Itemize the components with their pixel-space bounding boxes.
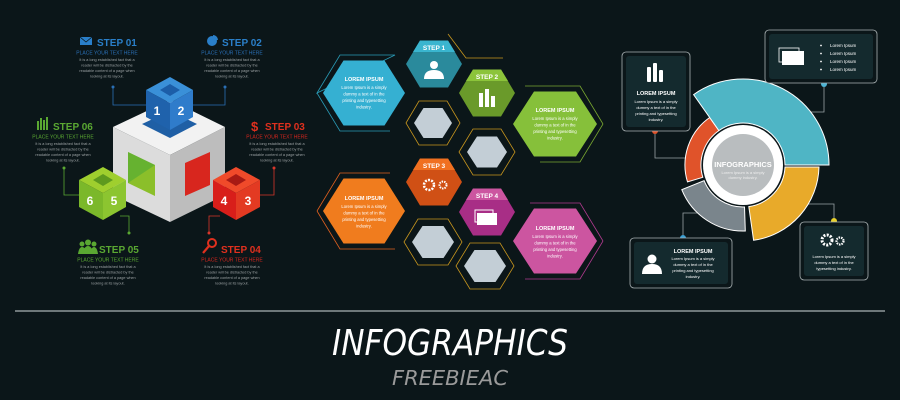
hex: step 1 — [406, 40, 462, 88]
hex: lorem orange: LOREM IPSUM — [345, 196, 384, 202]
step 04: STEP 04 — [221, 245, 261, 256]
step 02: looking at its layout. — [215, 74, 249, 78]
step 04: PLACE YOUR TEXT HERE — [201, 258, 263, 264]
hex: lorem green: dummy a text of in the — [534, 122, 576, 128]
step 02: PLACE YOUR TEXT HERE — [201, 50, 263, 56]
hex: step 2 — [459, 70, 515, 116]
step 01 — [76, 37, 138, 78]
green cube 6 5: 5 — [111, 194, 118, 208]
step 03: PLACE YOUR TEXT HERE — [246, 134, 308, 140]
hex: step 4 — [459, 188, 515, 236]
hex: lorem blue: printing and typesetting — [342, 98, 386, 103]
hex: step 1: STEP 1 — [423, 45, 446, 52]
red cube 4 3: 4 — [221, 194, 228, 208]
box: bullets — [765, 30, 877, 83]
center circle: INFOGRAPHICS — [714, 160, 772, 169]
step 04: reader will be distracted by the — [206, 270, 258, 274]
hex: step 2: STEP 2 — [476, 74, 499, 81]
green cube 6 5 — [79, 167, 126, 220]
title — [332, 323, 568, 390]
hex: lorem blue: industry. — [356, 104, 372, 110]
step 03: It is a long established fact that a — [249, 142, 306, 146]
step 01: reader will be distracted by the — [81, 64, 133, 68]
step 06: STEP 06 — [53, 122, 93, 133]
hex: lorem pink: printing and typesetting — [533, 247, 577, 252]
hex: step 3 — [406, 158, 462, 206]
box: bar chart — [622, 52, 690, 131]
box: gears — [800, 222, 868, 280]
hex: lorem orange: dummy a text of in the — [343, 210, 385, 216]
hex: lorem pink: Lorem Ipsum is a simply — [532, 234, 578, 239]
step 02: It is a long established fact that a — [204, 58, 261, 62]
box: person: Lorem Ipsum is a simply — [671, 256, 715, 261]
box: bullets: Lorem Ipsum — [830, 59, 857, 64]
hex: lorem orange — [323, 178, 405, 244]
step 04 — [201, 239, 263, 286]
step 06 — [32, 117, 94, 162]
center circle: Lorem Ipsum is a simply — [721, 170, 765, 175]
step 04: looking at its layout. — [215, 282, 249, 286]
step 05: looking at its layout. — [91, 282, 125, 286]
title: FREEBIEAC — [392, 366, 508, 390]
box: gears: typesetting industry. — [816, 266, 852, 271]
step 01: PLACE YOUR TEXT HERE — [76, 50, 138, 56]
hex: lorem orange: Lorem Ipsum is a simply — [341, 204, 387, 209]
step 03: $ — [251, 119, 259, 134]
title: INFOGRAPHICS — [332, 323, 568, 364]
red cube 4 3: 3 — [245, 194, 252, 208]
hex: lorem blue: Lorem Ipsum is a simply — [341, 85, 387, 90]
box: person: printing and typesetting — [672, 268, 714, 273]
green cube 6 5: 6 — [87, 194, 94, 208]
blue cube 1 2: 1 — [154, 104, 161, 118]
step 03: looking at its layout. — [260, 158, 294, 162]
hex: lorem pink — [513, 208, 597, 274]
hex: lorem pink: dummy a text of in the — [534, 240, 576, 246]
center circle — [703, 125, 783, 205]
connectors — [655, 84, 834, 238]
gray hexes — [412, 108, 507, 282]
center circle: dummy industry. — [728, 175, 758, 180]
box: person: industry. — [686, 274, 700, 279]
box: bullets: Lorem Ipsum — [830, 67, 857, 72]
step 06: PLACE YOUR TEXT HERE — [32, 134, 94, 140]
hex: lorem orange: industry. — [356, 224, 372, 228]
step 01: looking at its layout. — [90, 74, 124, 78]
step 05: It is a long established fact that a — [80, 265, 137, 269]
hex: lorem green: industry. — [547, 136, 563, 140]
step 06: looking at its layout. — [46, 158, 80, 162]
step 01: readable content of a page when — [79, 69, 135, 73]
hex: step 3: STEP 3 — [423, 163, 446, 170]
hex: lorem orange: printing and typesetting — [342, 217, 386, 222]
step 04: readable content of a page when — [204, 276, 260, 280]
box: bar chart: industry. — [649, 117, 663, 122]
panel: cube steps — [32, 35, 308, 286]
box: bar chart: dummy a text of in the — [636, 105, 676, 110]
step 05: readable content of a page when — [80, 276, 136, 280]
box: person: dummy a text of in the — [673, 262, 713, 267]
step 06: readable content of a page when — [35, 153, 91, 157]
step 03: readable content of a page when — [249, 153, 305, 157]
box: gears: dummy a text of in the — [814, 260, 854, 265]
box: person — [630, 238, 732, 288]
step 02 — [201, 35, 263, 78]
step 01: STEP 01 — [97, 38, 137, 49]
hex: lorem blue: dummy a text of in the — [343, 92, 385, 96]
ring segments — [682, 79, 829, 240]
decorative outlines — [317, 34, 603, 289]
box: bullets: Lorem Ipsum — [830, 51, 857, 56]
panel: circular diagram — [622, 30, 877, 288]
step 03: reader will be distracted by the — [251, 148, 303, 152]
step 05: reader will be distracted by the — [82, 270, 134, 274]
blue cube 1 2: 2 — [178, 104, 185, 118]
step 02: STEP 02 — [222, 38, 262, 49]
blue cube 1 2 — [146, 77, 193, 130]
connector lines — [62, 86, 276, 234]
hex: lorem green: printing and typesetting — [533, 129, 577, 134]
box: gears: Lorem Ipsum is a simply — [812, 254, 856, 259]
step 05 — [77, 240, 139, 286]
red cube 4 3 — [213, 167, 260, 220]
hex: lorem blue — [323, 60, 405, 126]
step 05: PLACE YOUR TEXT HERE — [77, 258, 139, 264]
step 04: It is a long established fact that a — [204, 265, 261, 269]
box: person: LOREM IPSUM — [674, 249, 713, 255]
hex: lorem green — [513, 92, 597, 156]
step 02: readable content of a page when — [204, 69, 260, 73]
box: bar chart: LOREM IPSUM — [637, 91, 676, 97]
box: bar chart: Lorem Ipsum is a simply — [634, 99, 678, 104]
step 03: STEP 03 — [265, 122, 305, 133]
dots — [652, 81, 837, 241]
hex: lorem pink: industry. — [547, 254, 563, 258]
step 01: It is a long established fact that a — [79, 58, 136, 62]
hex: lorem green: Lorem Ipsum is a simply — [532, 116, 578, 121]
box: bar chart: printing and typesetting — [635, 111, 677, 116]
hex: lorem pink: LOREM IPSUM — [536, 226, 575, 232]
hex: lorem blue: LOREM IPSUM — [345, 77, 384, 83]
step 06: It is a long established fact that a — [35, 142, 92, 146]
box: bullets: Lorem Ipsum — [830, 43, 857, 48]
hex: lorem green: LOREM IPSUM — [536, 108, 575, 114]
big white cube — [113, 100, 225, 222]
hex: step 4: STEP 4 — [476, 193, 499, 200]
panel: hexagon steps — [317, 34, 603, 289]
step 02: reader will be distracted by the — [206, 64, 258, 68]
step 06: reader will be distracted by the — [37, 148, 89, 152]
step 05: STEP 05 — [99, 245, 139, 256]
step 03 — [246, 119, 308, 162]
